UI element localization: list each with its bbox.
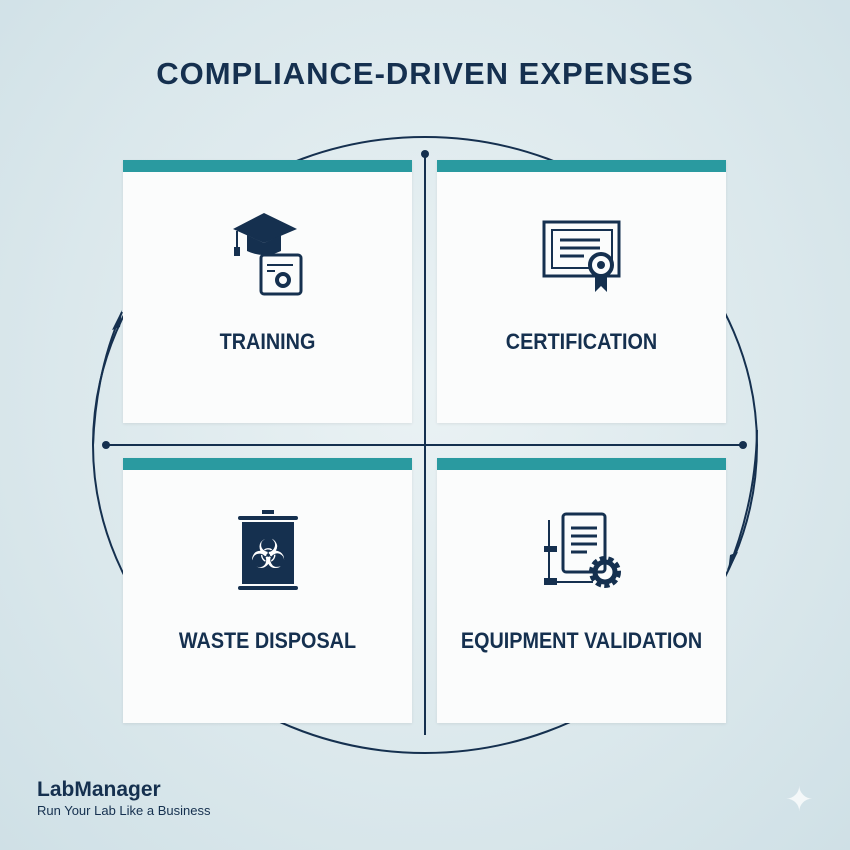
icon: document with gear — [544, 512, 621, 588]
title: COMPLIANCE-DRIVEN EXPENSES — [156, 56, 694, 91]
logo: LabManager: LabManager — [37, 778, 161, 801]
icon: sparkle: ✦ — [785, 781, 814, 819]
icon: biohazard bin: ☣ — [250, 532, 286, 578]
panel: training — [123, 160, 412, 423]
panel: waste disposal — [123, 458, 412, 723]
icon: biohazard bin — [238, 510, 298, 590]
label: waste disposal: WASTE DISPOSAL — [179, 628, 356, 653]
label: training: TRAINING — [220, 329, 315, 354]
logo: LabManager — [37, 778, 210, 818]
panel: certification — [437, 160, 726, 423]
logo: LabManager: Run Your Lab Like a Business — [37, 803, 210, 818]
icon: graduation cap with document — [233, 213, 302, 296]
icon: certificate — [542, 220, 620, 292]
label: equipment validation: EQUIPMENT VALIDATION — [461, 628, 702, 653]
label: certification: CERTIFICATION — [506, 329, 657, 354]
panel: equipment validation — [437, 458, 726, 723]
